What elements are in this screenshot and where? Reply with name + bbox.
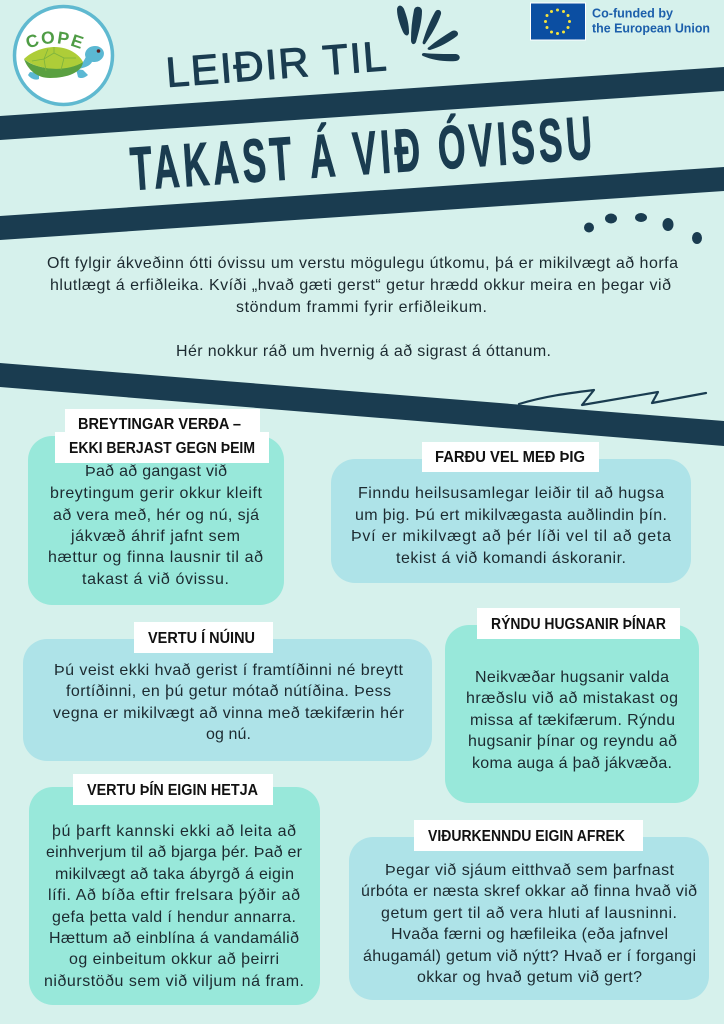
panel: vertu þín eigin hetja: lífi. Að bíða eftir frelsara þýðir að [48, 887, 300, 904]
panel: farðu vel með þig: tekist á við komandi áskoranir. [396, 550, 626, 567]
panel: breytingar verða: EKKI BERJAST GEGN ÞEIM [69, 440, 255, 457]
decorative dots [584, 213, 702, 244]
panel: viðurkenndu eigin afrek: getum gert til að vera hluti af lausninni. [381, 905, 677, 922]
panel: breytingar verða [28, 409, 284, 605]
panel: farðu vel með þig: um þig. Þú ert mikilvægasta auðlindin þín. [355, 507, 667, 524]
panel: vertu þín eigin hetja: niðurstöðu sem við viljum ná fram. [44, 973, 304, 990]
panel: breytingar verða: BREYTINGAR VERÐA – [78, 416, 241, 433]
panel: rýndu hugsanir þínar [445, 608, 699, 803]
panel: breytingar verða: jákvæð áhrif jafnt sem [70, 528, 240, 545]
title line 1: LEIÐIR TIL [164, 32, 388, 96]
co-funded text: the European Union [592, 22, 710, 36]
panel: vertu þín eigin hetja: einhverjum til að bjarga þér. Það er [46, 844, 303, 861]
logo: COPE turtle: COPE [26, 31, 84, 49]
title line 2: TAKAST Á VIÐ ÓVISSU [128, 104, 594, 203]
decorative zigzag [519, 390, 706, 405]
EU emblem [530, 3, 586, 40]
panel: rýndu hugsanir þínar: missa af tækifærum. Rýndu [470, 712, 675, 729]
panel: vertu í núinu: fortíðinni, en þú getur mótað nútíðina. Þess [66, 683, 391, 700]
panel: breytingar verða: breytingum gerir okkur kleift [50, 485, 263, 502]
intro text: Oft fylgir ákveðinn ótti óvissu um verstu mögulegu útkomu, þá er mikilvægt að horfa [47, 255, 678, 272]
panel: vertu þín eigin hetja: þú þarft kannski ekki að leita að [52, 823, 296, 840]
panel: vertu þín eigin hetja: mikilvægt að taka ábyrgð á eigin [55, 866, 294, 883]
panel: viðurkenndu eigin afrek: Þegar við sjáum eitthvað sem þarfnast [385, 862, 675, 879]
intro text [47, 255, 678, 360]
panel: vertu í núinu: vegna er mikilvægt að vinna með tækifærin hér [53, 705, 405, 722]
panel: rýndu hugsanir þínar: hræðslu við að mistakast og [466, 690, 678, 707]
intro text: Hér nokkur ráð um hvernig á að sigrast á óttanum. [176, 343, 551, 360]
co-funded text [592, 6, 710, 36]
co-funded text: Co-funded by [592, 6, 673, 20]
panel: breytingar verða: hættur og finna lausnir til að [48, 549, 263, 566]
panel: breytingar verða: að vera með, hér og nú, sjá [53, 507, 259, 524]
icon: sun rays [397, 6, 460, 61]
panel: viðurkenndu eigin afrek [349, 820, 709, 1000]
panel: vertu þín eigin hetja: VERTU ÞÍN EIGIN HETJA [87, 782, 258, 799]
panel: viðurkenndu eigin afrek: okkar og hvað getum við gert? [417, 969, 642, 986]
panel: vertu í núinu: VERTU Í NÚINU [148, 629, 255, 647]
panel: vertu í núinu: og nú. [206, 726, 251, 743]
panel: vertu þín eigin hetja: Hættum að einblína á vandamálið [49, 930, 299, 947]
panel: viðurkenndu eigin afrek: úrbóta er næsta skref okkar að finna hvað við [361, 883, 697, 900]
intro text: stöndum frammi fyrir erfiðleikum. [236, 299, 487, 316]
panel: vertu þín eigin hetja: og einbeitum okkur að þeirri [69, 951, 279, 968]
panel: vertu í núinu: Þú veist ekki hvað gerist í framtíðinni né breytt [54, 662, 404, 679]
panel: rýndu hugsanir þínar: koma auga á það jákvæða. [472, 755, 672, 772]
panel: viðurkenndu eigin afrek: Hvaða færni og hæfileika (eða jafnvel [391, 926, 668, 943]
panel: vertu þín eigin hetja [29, 774, 320, 1005]
panel: vertu þín eigin hetja: gefa þetta vald í hendur annarra. [52, 909, 296, 926]
panel: rýndu hugsanir þínar: RÝNDU HUGSANIR ÞÍNAR [491, 615, 666, 633]
panel: breytingar verða: takast á við óvissu. [82, 571, 229, 588]
panel: rýndu hugsanir þínar: hugsanir þínar og reyndu að [468, 733, 677, 750]
panel: farðu vel með þig [331, 442, 691, 583]
panel: farðu vel með þig: FARÐU VEL MEÐ ÞIG [435, 449, 585, 466]
panel: farðu vel með þig: Því er mikilvægt að þér líði vel til að geta [351, 528, 671, 545]
panel: viðurkenndu eigin afrek: VIÐURKENNDU EIGIN AFREK [428, 828, 626, 845]
panel: farðu vel með þig: Finndu heilsusamlegar leiðir til að hugsa [358, 485, 664, 502]
intro text: hlutlægt á erfiðleika. Kvíði „hvað gæti gerst“ getur hrædd okkur meira en þegar við [50, 277, 671, 294]
panel: rýndu hugsanir þínar: Neikvæðar hugsanir valda [475, 669, 669, 686]
logo: COPE turtle [12, 4, 114, 106]
panel: breytingar verða: Það að gangast við [85, 463, 227, 480]
panel: vertu í núinu [23, 622, 432, 761]
panel: viðurkenndu eigin afrek: áhugamál) getum við nýtt? Hvað er í forgangi [363, 948, 696, 965]
